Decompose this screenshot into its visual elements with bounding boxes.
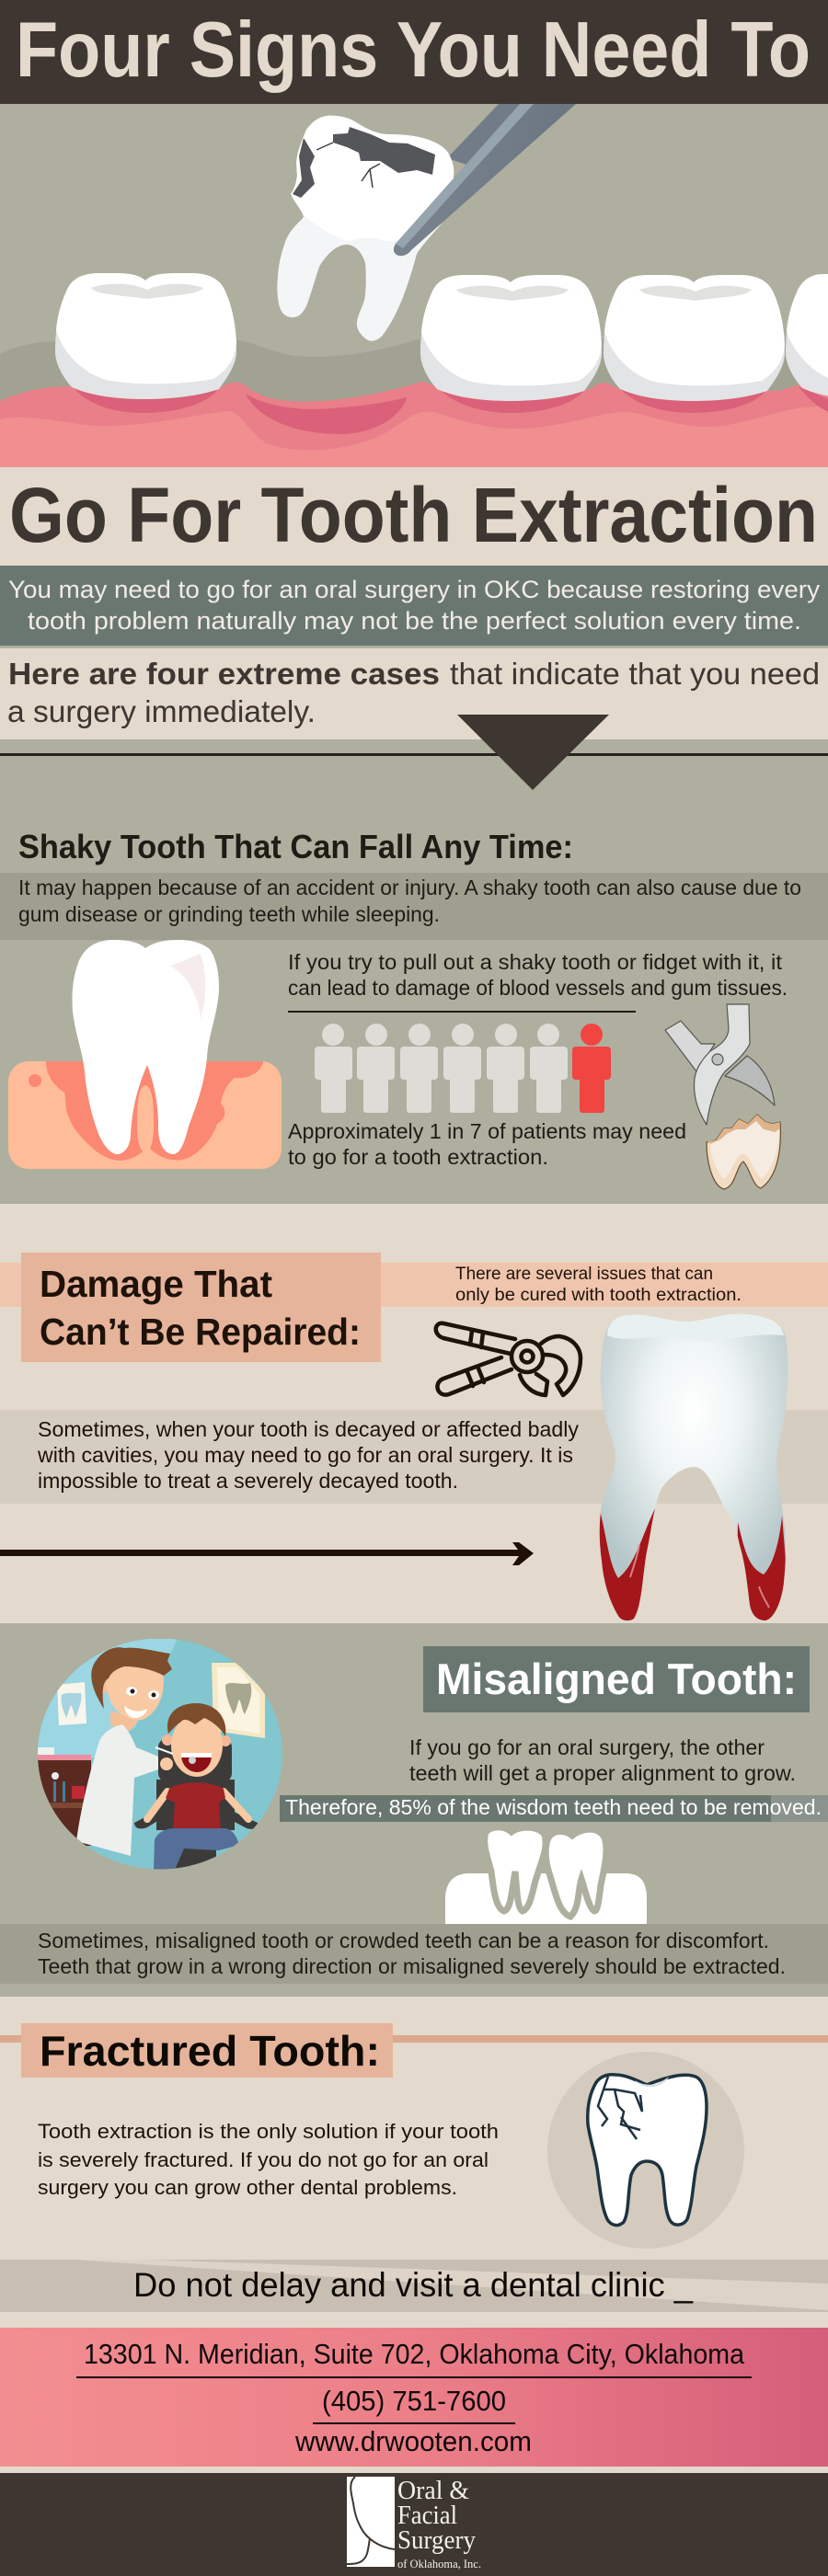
- description band: Teeth that grow in a wrong direction or misaligned severely should be extracted.: [38, 1954, 786, 1978]
- heading: shaky tooth: Shaky Tooth That Can Fall Any Time:: [18, 828, 573, 865]
- arrow: down triangle: [457, 715, 609, 790]
- text: alignment: If you go for an oral surgery, the other: [409, 1735, 765, 1759]
- text: pulling a shaky tooth: [288, 950, 788, 1000]
- description band: It may happen because of an accident or injury. A shaky tooth can also cause due to: [18, 876, 801, 899]
- call to action band: [0, 2260, 828, 2312]
- poster: molar: [212, 1663, 265, 1738]
- description band: with cavities, you may need to go for an oral surgery. It is: [37, 1443, 573, 1467]
- patient head: [155, 1703, 231, 1777]
- front tweezer arm: [394, 104, 576, 256]
- back gum shadow: [0, 338, 828, 432]
- patient body: [147, 1782, 248, 1870]
- text: issues: There are several issues that can: [455, 1265, 713, 1284]
- lead-in text: Here are four extreme cases: [8, 657, 440, 691]
- text: issues: only be cured with tooth extraction.: [455, 1286, 742, 1305]
- text: pulling a shaky tooth: can lead to damage of blood vessels and gum tissues.: [288, 976, 788, 1000]
- dentist head: [91, 1647, 172, 1731]
- icon: tooth in diseased gum: [8, 940, 282, 1169]
- website: www.drwooten.com: [294, 2425, 532, 2457]
- hero illustration: tooth extraction: [0, 104, 828, 467]
- arrow: right: [0, 1542, 534, 1565]
- logo text: Facial: [397, 2502, 457, 2530]
- text: 1 in 7 patients: [288, 1119, 686, 1169]
- tooth left: [55, 273, 236, 399]
- logo text: Surgery: [397, 2526, 476, 2555]
- description band: gum disease or grinding teeth while sleeping.: [18, 902, 440, 926]
- heading: damage: [21, 1253, 381, 1362]
- heading: damage: Damage That: [40, 1263, 272, 1305]
- description band: [0, 1924, 828, 1984]
- extracted tooth with cavity: [277, 116, 454, 341]
- text: fractured tooth: surgery you can grow other dental problems.: [38, 2176, 457, 2199]
- dentist hand: [160, 1757, 173, 1770]
- address: 13301 N. Meridian, Suite 702, Oklahoma City, Oklahoma: [84, 2338, 745, 2370]
- tooth right: [604, 275, 785, 401]
- intro text line 1: You may need to go for an oral surgery in OKC because restoring every: [8, 576, 821, 603]
- heading: fractured: Fractured Tooth:: [40, 2027, 380, 2075]
- text: fractured tooth: Tooth extraction is the only solution if your tooth: [38, 2120, 499, 2143]
- illustration: dentist treating patient: [38, 1639, 282, 1872]
- description band: Sometimes, misaligned tooth or crowded teeth can be a reason for discomfort.: [38, 1929, 769, 1952]
- description band: [0, 1410, 828, 1504]
- call to action band: Do not delay and visit a dental clinic _: [133, 2266, 693, 2304]
- intro band: [0, 566, 828, 648]
- contact panel: [0, 2328, 828, 2467]
- icon: dental pliers: [665, 1004, 775, 1125]
- icon: impacted teeth: [445, 1827, 647, 1924]
- text: alignment: [409, 1735, 796, 1785]
- description band: [0, 873, 828, 940]
- cabinet: [38, 1747, 91, 1846]
- lead-in text: a surgery immediately.: [7, 694, 316, 728]
- phone: (405) 751-7600: [322, 2385, 506, 2417]
- description band: Sometimes, when your tooth is decayed or affected badly: [38, 1417, 579, 1441]
- text: pulling a shaky tooth: If you try to pull out a shaky tooth or fidget with it, it: [288, 950, 783, 974]
- panel: fractured tooth: [0, 1997, 828, 2328]
- lead-in text: [7, 657, 820, 728]
- text: issues: [455, 1265, 742, 1305]
- heading: damage: Can’t Be Repaired:: [40, 1311, 361, 1353]
- text: fractured tooth: is severely fractured. If you do not go for an oral: [38, 2148, 489, 2171]
- text: 1 in 7 patients: Approximately 1 in 7 of patients may need: [288, 1119, 686, 1143]
- logo mark: [347, 2477, 395, 2567]
- tooth far right: [786, 274, 828, 400]
- gums: [0, 382, 828, 467]
- dentist coat: [76, 1724, 164, 1856]
- poster: healthy tooth: [57, 1682, 86, 1725]
- callout: 85 percent: Therefore, 85% of the wisdom teeth need to be removed.: [285, 1795, 822, 1819]
- logo text: of Oklahoma, Inc.: [397, 2558, 481, 2570]
- text: alignment: teeth will get a proper alignment to grow.: [409, 1761, 796, 1785]
- description band: impossible to treat a severely decayed tooth.: [38, 1469, 458, 1493]
- logo text: Oral &: [397, 2477, 469, 2505]
- logo text: [397, 2477, 481, 2570]
- icon: forceps: [436, 1323, 581, 1395]
- tooth middle: [420, 275, 602, 401]
- panel: shaky tooth: [0, 715, 828, 1204]
- text: fractured tooth: [38, 2120, 499, 2199]
- chart: 1 in 7 people: [315, 1024, 611, 1113]
- back tweezer arm: [447, 104, 521, 166]
- lead-in text: that indicate that you need: [450, 657, 820, 691]
- chair: [134, 1738, 258, 1872]
- icon: cracked tooth: [547, 2052, 744, 2249]
- heading: misaligned: [423, 1646, 810, 1712]
- panel: damage that can't be repaired: [0, 1253, 828, 1620]
- text: 1 in 7 patients: to go for a tooth extraction.: [288, 1145, 548, 1169]
- title band top: [0, 0, 828, 104]
- intro text line 2: tooth problem naturally may not be the perfect solution every time.: [28, 607, 801, 635]
- footer with logo: [0, 2473, 828, 2576]
- icon: bleeding tooth: [593, 1314, 791, 1628]
- icon: decayed tooth: [707, 1115, 780, 1189]
- heading: misaligned: Misaligned Tooth:: [436, 1654, 797, 1703]
- panel: misaligned tooth: [0, 1623, 828, 1997]
